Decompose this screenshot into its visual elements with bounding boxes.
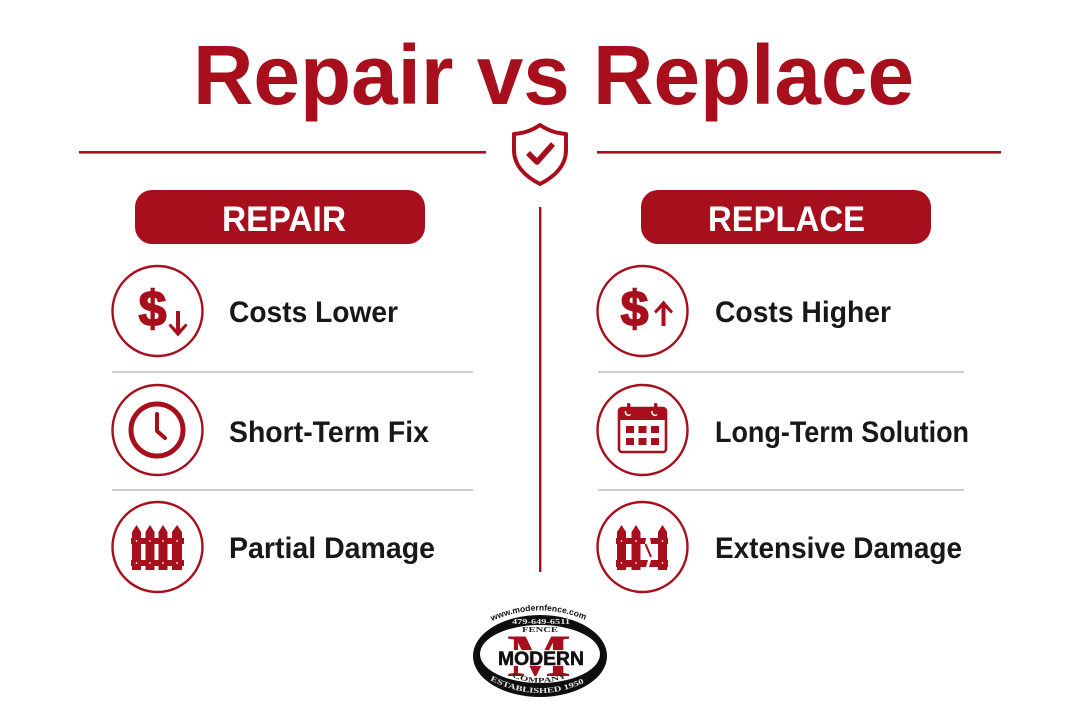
row: costs higher — [598, 266, 891, 356]
icon: shield with check — [514, 125, 566, 184]
title: Repair vs Replace — [193, 28, 914, 122]
center divider — [539, 207, 541, 572]
icon: clock — [112, 385, 202, 475]
icon: intact fence — [112, 502, 202, 592]
row: long-term solution: Long-Term Solution — [715, 416, 969, 449]
icon: dollar with up arrow — [598, 266, 688, 356]
row: partial damage — [112, 502, 435, 592]
row: short-term fix: Short-Term Fix — [229, 416, 429, 449]
row: costs lower: Costs Lower — [229, 296, 398, 329]
row: extensive damage: Extensive Damage — [715, 532, 962, 565]
panel: replace — [598, 190, 969, 592]
logo: Modern Fence Company: FENCE — [522, 625, 558, 634]
icon: broken fence — [598, 502, 688, 592]
header divider right — [597, 151, 1001, 154]
replace heading pill — [641, 190, 931, 244]
logo: Modern Fence Company — [473, 604, 607, 697]
row: short-term fix — [112, 385, 429, 475]
logo: Modern Fence Company: 479-649-6511 — [512, 617, 570, 626]
icon: dollar with up arrow: $ — [621, 281, 649, 337]
logo: Modern Fence Company: www.modernfence.com — [490, 604, 586, 621]
icon: dollar with down arrow: $ — [139, 281, 167, 337]
header divider left — [79, 151, 486, 154]
logo: Modern Fence Company: COMPANY — [513, 673, 566, 683]
row: long-term solution — [598, 385, 969, 475]
logo: Modern Fence Company: MODERN — [498, 649, 584, 670]
row: costs higher: Costs Higher — [715, 296, 891, 329]
repair heading pill — [135, 190, 425, 244]
icon: calendar — [598, 385, 688, 475]
replace heading pill: REPLACE — [708, 200, 865, 239]
icon: dollar with down arrow — [112, 266, 202, 356]
repair heading pill: REPAIR — [222, 200, 346, 239]
panel: repair — [112, 190, 473, 592]
logo: Modern Fence Company: ESTABLISHED 1950 — [490, 676, 584, 694]
row: costs lower — [112, 266, 398, 356]
row: extensive damage — [598, 502, 962, 592]
row: partial damage: Partial Damage — [229, 532, 435, 565]
logo: Modern Fence Company: M — [507, 623, 571, 689]
